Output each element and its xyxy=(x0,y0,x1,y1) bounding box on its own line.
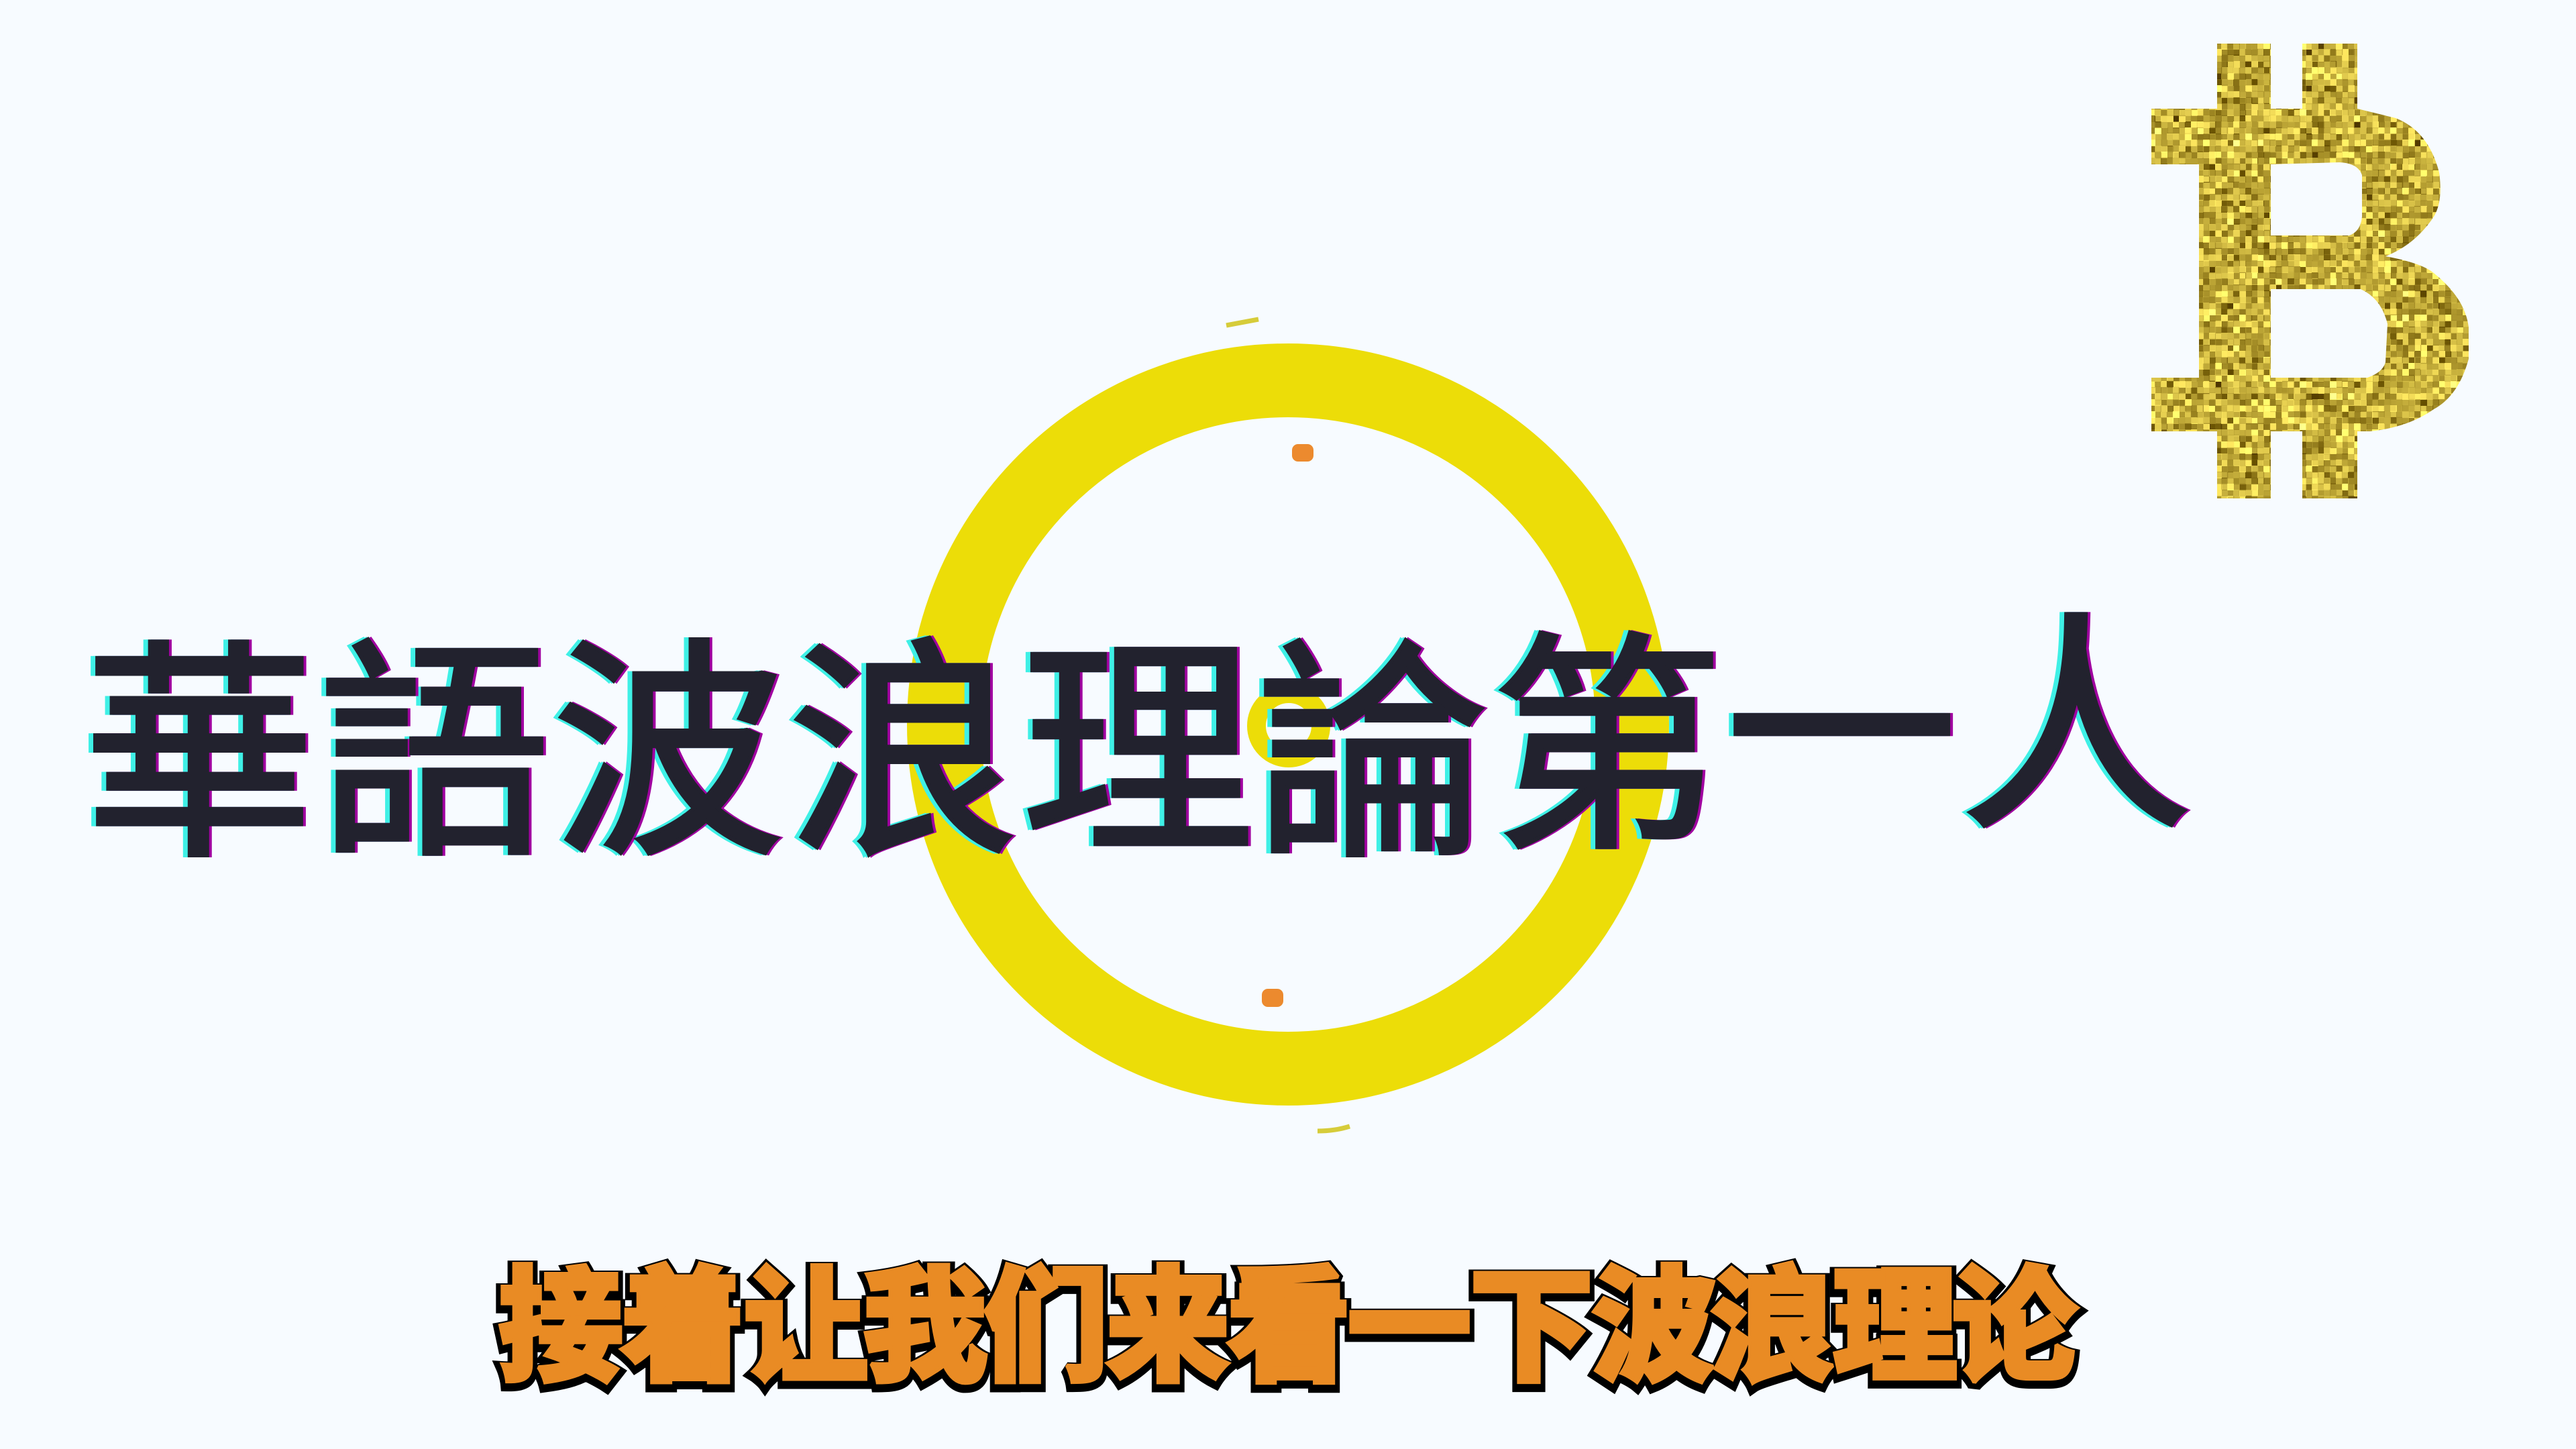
orange dot top xyxy=(1292,444,1313,462)
caption: 接着让我们来看一下波浪理论 xyxy=(498,1258,2078,1397)
yellow ring xyxy=(944,380,1632,1069)
icon: gold bitcoin symbol xyxy=(2151,44,2469,498)
yellow dash bottom xyxy=(1318,1126,1350,1131)
caption: 接着让我们来看一下波浪理论 xyxy=(498,1262,2078,1401)
title: 華語波浪理論第一人 xyxy=(83,599,2192,886)
yellow dash top xyxy=(1226,319,1258,325)
small centre ring xyxy=(1256,694,1321,758)
orange dot bottom xyxy=(1262,989,1283,1007)
